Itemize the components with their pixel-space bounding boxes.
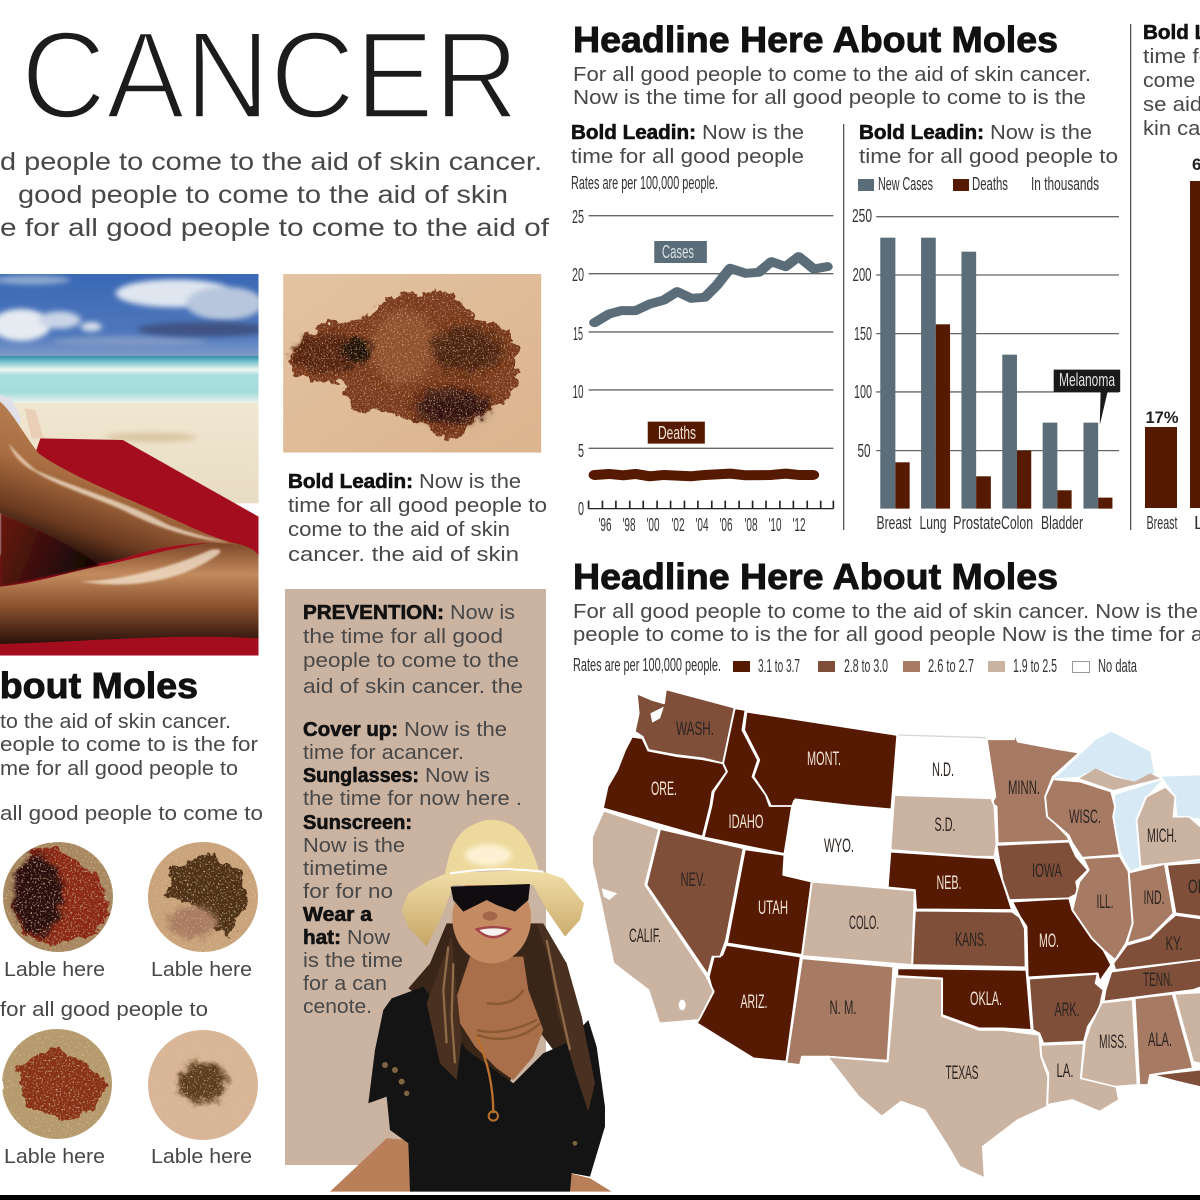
state labels: NEV. <box>680 870 706 891</box>
map legend: 1.9 to 2.5 <box>1013 656 1057 676</box>
lower leg <box>0 542 259 644</box>
panel: bar chart: 150 <box>854 324 872 344</box>
title: CANCER <box>21 7 519 145</box>
panel: prevention: is the time <box>303 950 403 972</box>
mole circle 2 <box>148 842 258 952</box>
state labels: TEXAS <box>946 1063 978 1084</box>
mole labels <box>4 959 252 1168</box>
black top <box>368 987 605 1192</box>
skin chest and neck <box>457 957 543 1080</box>
nose <box>483 911 497 921</box>
intro text: e for all good people to come to the aid of <box>0 214 549 242</box>
left body text: eople to come to is the for <box>0 734 258 756</box>
mole circle 3 <box>2 1029 112 1139</box>
panel: right bar chart <box>1130 24 1200 533</box>
top intro text: Now is the time for all good people to come to is the <box>573 87 1086 109</box>
panel: bar chart: 200 <box>852 265 872 285</box>
line chart plot <box>589 216 833 509</box>
necklaces <box>477 990 540 1113</box>
panel: line chart: 10 <box>572 382 584 402</box>
panel: line chart: Cases <box>662 242 694 262</box>
state labels: UTAH <box>758 898 788 919</box>
panel: prevention: Now is <box>425 765 490 787</box>
sunglasses <box>451 884 530 912</box>
mole circle 4 <box>148 1030 258 1140</box>
panel: prevention: time for acancer. <box>303 742 464 764</box>
left body text: for all good people to <box>0 999 208 1021</box>
panel: line chart: Deaths <box>658 423 696 443</box>
mole blob <box>293 295 514 435</box>
state labels: N. M. <box>830 998 856 1019</box>
mole caption: Now is the <box>419 471 521 493</box>
state labels: ALA. <box>1148 1030 1172 1051</box>
headline: top: Headline Here About Moles <box>573 19 1058 60</box>
state labels: ILL. <box>1096 892 1114 913</box>
bars <box>876 217 1120 509</box>
smile <box>477 927 510 937</box>
state labels: COLO. <box>849 913 879 934</box>
map legend: 2.8 to 3.0 <box>844 656 888 676</box>
mole labels: Lable here <box>151 959 252 981</box>
panel: bar chart: Bold Leadin: <box>859 122 984 144</box>
state labels: S.D. <box>934 815 956 836</box>
panel: line chart: Now is the <box>702 122 804 144</box>
panel: prevention: the time for all good <box>303 626 503 648</box>
state labels: WYO. <box>824 836 854 857</box>
state labels: MONT. <box>807 749 841 770</box>
state shapes <box>592 689 1200 1178</box>
dark gap between legs <box>0 512 100 587</box>
intro text: good people to come to the aid of skin <box>18 181 508 209</box>
mole labels: Lable here <box>4 1146 105 1168</box>
state labels: IOWA <box>1032 861 1062 882</box>
state labels: NEB. <box>936 873 962 894</box>
mole caption: time for all good people to <box>288 495 547 517</box>
left body text <box>0 711 263 1021</box>
top intro text: For all good people to come to the aid of skin cancer. <box>573 64 1091 86</box>
upper leg <box>0 402 239 563</box>
face <box>452 873 531 963</box>
panel: bar chart: Lung <box>920 513 946 533</box>
state labels: OKLA. <box>970 989 1002 1010</box>
panel: prevention <box>285 589 546 1165</box>
left body text: all good people to come to <box>0 803 263 825</box>
state labels: ARIZ. <box>740 992 768 1013</box>
panel: bar chart <box>843 122 1120 533</box>
panel: line chart: '96 <box>598 515 612 535</box>
state labels: LA. <box>1056 1061 1074 1082</box>
panel: line chart: '12 <box>792 515 806 535</box>
right clipped text block <box>1143 22 1200 140</box>
panel: bar chart: Bladder <box>1041 513 1083 533</box>
panel: right bar chart: 17% <box>1146 408 1178 427</box>
panel: prevention: Now <box>347 927 391 949</box>
panel: prevention: timetime <box>303 858 388 880</box>
panel: bar chart: time for all good people to <box>859 146 1118 168</box>
panel: prevention: Sunscreen: <box>303 812 412 834</box>
panel: line chart <box>571 122 833 535</box>
mole caption: come to the aid of skin <box>288 519 510 541</box>
panel: line chart: '08 <box>744 515 758 535</box>
panel: prevention: Now is <box>450 602 515 624</box>
panel: line chart: 5 <box>578 441 584 461</box>
panel: prevention: people to come to the <box>303 650 519 672</box>
mole caption <box>288 471 547 566</box>
hair back <box>408 923 595 1118</box>
bar chart legend: Deaths <box>972 174 1008 194</box>
panel: line chart: '00 <box>646 515 660 535</box>
bar chart legend: New Cases <box>878 174 933 194</box>
panel: prevention: hat: <box>303 927 341 949</box>
panel: line chart: 0 <box>578 499 584 519</box>
left body text: me for all good people to <box>0 758 238 780</box>
panel: line chart: time for all good people <box>571 146 804 168</box>
panel: prevention: aid of skin cancer. the <box>303 676 523 698</box>
mole labels: Lable here <box>151 1146 252 1168</box>
hair strands <box>427 923 595 1112</box>
left body text: to the aid of skin cancer. <box>0 711 231 733</box>
US choropleth map <box>592 689 1200 1178</box>
photo: melanoma close-up <box>283 274 541 453</box>
panel: prevention: Wear a <box>303 904 373 926</box>
panel: line chart: '04 <box>696 515 708 535</box>
panel: line chart: '06 <box>720 515 732 535</box>
state labels: WASH. <box>676 719 714 740</box>
map legend: 3.1 to 3.7 <box>758 656 800 676</box>
hat <box>402 820 584 947</box>
state labels: KY. <box>1166 934 1182 955</box>
state labels: KANS. <box>955 930 987 951</box>
towel <box>0 438 259 656</box>
panel: prevention: Sunglasses: <box>303 765 419 787</box>
state labels: IDAHO <box>728 812 764 833</box>
panel: line chart: '02 <box>672 515 684 535</box>
panel: line chart: 20 <box>572 265 584 285</box>
panel: prevention: Now is the <box>404 719 507 741</box>
panel: prevention: Now is the <box>303 835 405 857</box>
panel: bar chart: Prostate <box>953 513 1001 533</box>
state labels: MINN. <box>1008 778 1040 799</box>
arms <box>330 1138 612 1192</box>
panel: line chart: '98 <box>622 515 636 535</box>
panel: bar chart: 100 <box>854 382 872 402</box>
panel: prevention: for a can <box>303 973 387 995</box>
panel: bar chart: Melanoma <box>1059 370 1116 390</box>
state labels: MISS. <box>1099 1032 1127 1053</box>
state labels: CALIF. <box>629 926 661 947</box>
panel: line chart: Bold Leadin: <box>571 122 696 144</box>
panel: bar chart: Now is the <box>990 122 1092 144</box>
panel: right bar chart: Breast <box>1146 513 1178 533</box>
panel: prevention: PREVENTION: <box>303 602 444 624</box>
panel: line chart: '10 <box>768 515 782 535</box>
state labels: MO. <box>1039 931 1059 952</box>
panel: prevention: cenote. <box>303 996 372 1018</box>
panel: line chart: Rates are per 100,000 people. <box>571 173 718 193</box>
map legend: No data <box>1098 656 1138 676</box>
intro text <box>0 148 549 242</box>
map intro text <box>573 601 1200 646</box>
bar chart legend <box>858 174 1099 194</box>
intro text: d people to come to the aid of skin cancer. <box>0 148 542 176</box>
state labels: TENN. <box>1143 970 1173 991</box>
map intro text: For all good people to come to the aid of skin cancer. Now is the <box>573 601 1198 623</box>
state labels: IND. <box>1144 888 1164 909</box>
top intro text <box>573 64 1091 109</box>
lace cutouts <box>382 1062 577 1146</box>
panel: prevention: Cover up: <box>303 719 398 741</box>
panel: prevention: for for no <box>303 881 393 903</box>
mole caption: Bold Leadin: <box>288 471 413 493</box>
map legend <box>573 655 1138 676</box>
mole caption: cancer. the aid of skin <box>288 544 519 566</box>
panel: bar chart: Breast <box>876 513 912 533</box>
map intro text: people to come to is the for all good people Now is the time for all <box>573 624 1200 646</box>
panel: prevention: the time for now here . <box>303 788 522 810</box>
state labels: ORE. <box>651 779 677 800</box>
photo: beach sunbather <box>0 274 270 656</box>
map legend: Rates are per 100,000 people. <box>573 655 721 675</box>
photo: woman in sun hat <box>330 820 612 1192</box>
map legend: 2.6 to 2.7 <box>928 656 974 676</box>
state labels: N.D. <box>932 760 954 781</box>
mole circle 1 <box>3 842 113 952</box>
panel: bar chart: Colon <box>1001 513 1033 533</box>
mole labels: Lable here <box>4 959 105 981</box>
state labels <box>629 719 1200 1084</box>
state labels: WISC. <box>1069 807 1101 828</box>
panel: line chart: 25 <box>572 207 584 227</box>
panel: bar chart: 50 <box>858 441 870 461</box>
bar chart legend: In thousands <box>1031 174 1099 194</box>
bottom rule <box>0 1195 1200 1200</box>
panel: bar chart: 250 <box>852 206 872 226</box>
state labels: MICH. <box>1147 826 1177 847</box>
swimsuit and cloth <box>0 395 21 427</box>
state labels: ARK. <box>1054 1000 1080 1021</box>
headline: map: Headline Here About Moles <box>573 556 1058 597</box>
panel: line chart: 15 <box>573 324 583 344</box>
